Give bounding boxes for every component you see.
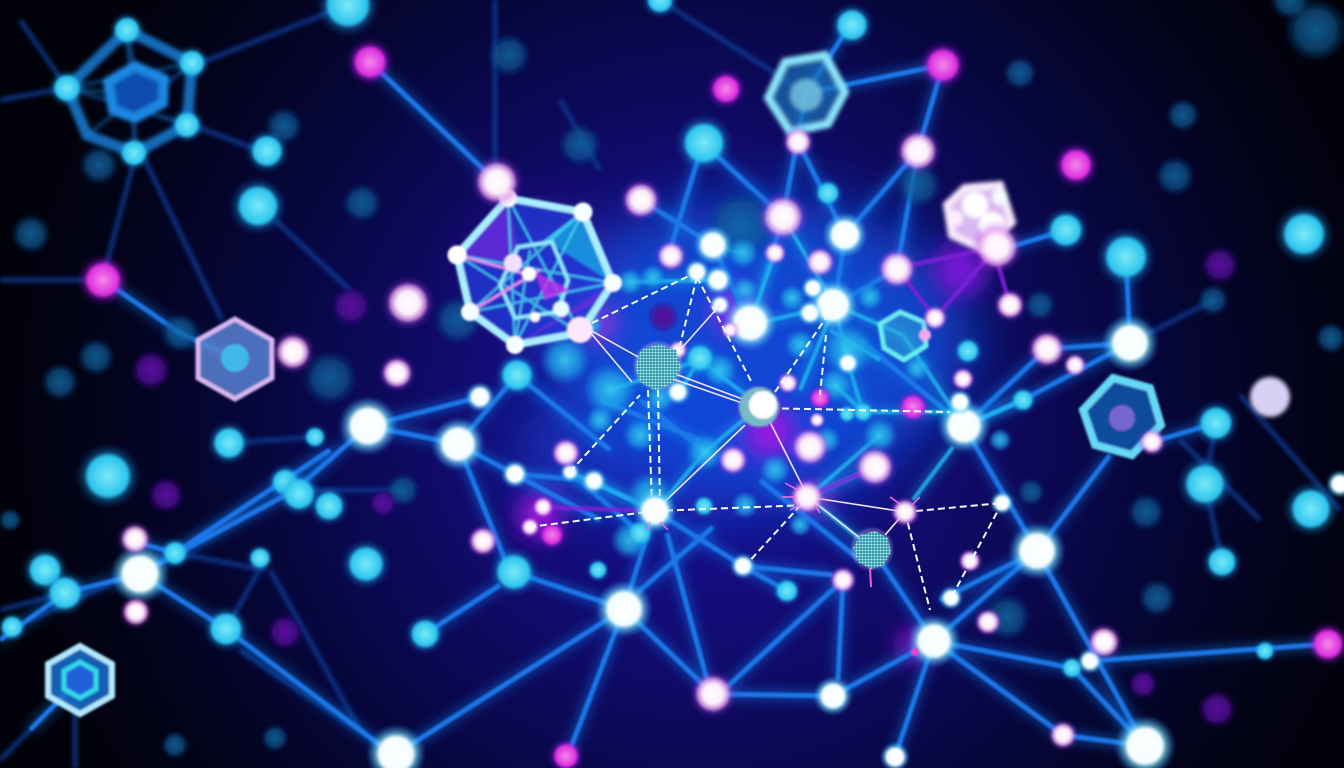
soft cyan cluster in the centre xyxy=(539,237,1012,560)
mesh sphere: upper xyxy=(634,342,682,390)
mesh sphere: lower xyxy=(851,528,893,587)
hexagon: bottom left xyxy=(48,646,112,714)
purple glow patches xyxy=(518,244,986,661)
bright cyan connections in the centre xyxy=(570,217,1023,549)
purple connections xyxy=(540,247,1010,511)
dashed highlight network xyxy=(529,272,1002,610)
hexagon: top centre xyxy=(768,55,845,132)
central glow xyxy=(470,200,970,520)
hexagon: upper right pink xyxy=(947,185,1012,250)
hexagon: left pink xyxy=(198,319,272,399)
solid white links xyxy=(590,305,905,538)
hexagon: right xyxy=(1083,378,1161,455)
hexagon: large central xyxy=(448,189,622,354)
pale lilac node xyxy=(1250,377,1290,417)
hexagon: top left xyxy=(67,30,192,153)
bright star nodes xyxy=(633,383,921,656)
white nodes xyxy=(110,212,1344,768)
hexagon: centre right xyxy=(880,312,931,360)
pink-white nodes xyxy=(117,125,1167,751)
